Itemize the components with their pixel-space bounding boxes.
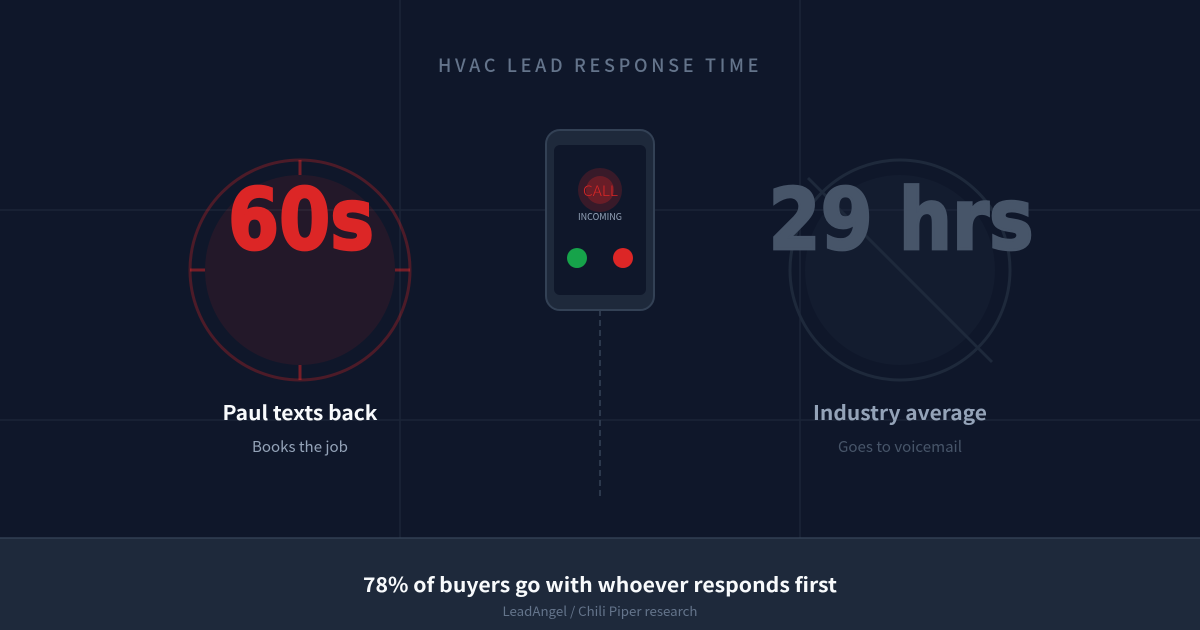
panel: Industry average bbox=[768, 160, 1034, 457]
stat: 60s: 60s bbox=[228, 171, 374, 270]
footer headline: 78% of buyers go with whoever responds first bbox=[363, 569, 838, 598]
stat: 29 hrs: 29 hrs bbox=[768, 171, 1034, 270]
title: HVAC LEAD RESPONSE TIME bbox=[438, 52, 762, 78]
panel: Paul texts back bbox=[190, 160, 410, 457]
icon: phone bbox=[546, 130, 654, 310]
icon: answer button bbox=[567, 248, 587, 268]
icon: red stopwatch dial bbox=[190, 160, 410, 380]
text: INCOMING: INCOMING bbox=[578, 210, 622, 223]
label: Industry average: Industry average bbox=[813, 397, 987, 426]
text: CALL: CALL bbox=[583, 181, 618, 201]
sublabel: Books the job: Books the job bbox=[252, 436, 348, 457]
panel: incoming call phone bbox=[546, 130, 654, 496]
label: Paul texts back: Paul texts back bbox=[222, 397, 378, 426]
footer band bbox=[0, 538, 1200, 630]
icon: ringing pulse bbox=[578, 168, 622, 212]
sublabel: Goes to voicemail: Goes to voicemail bbox=[838, 436, 962, 457]
connector: dashed line bbox=[599, 310, 601, 496]
icon: crossed-out dial bbox=[790, 160, 1010, 380]
footer source: LeadAngel / Chili Piper research bbox=[502, 601, 698, 620]
icon: decline button bbox=[613, 248, 633, 268]
